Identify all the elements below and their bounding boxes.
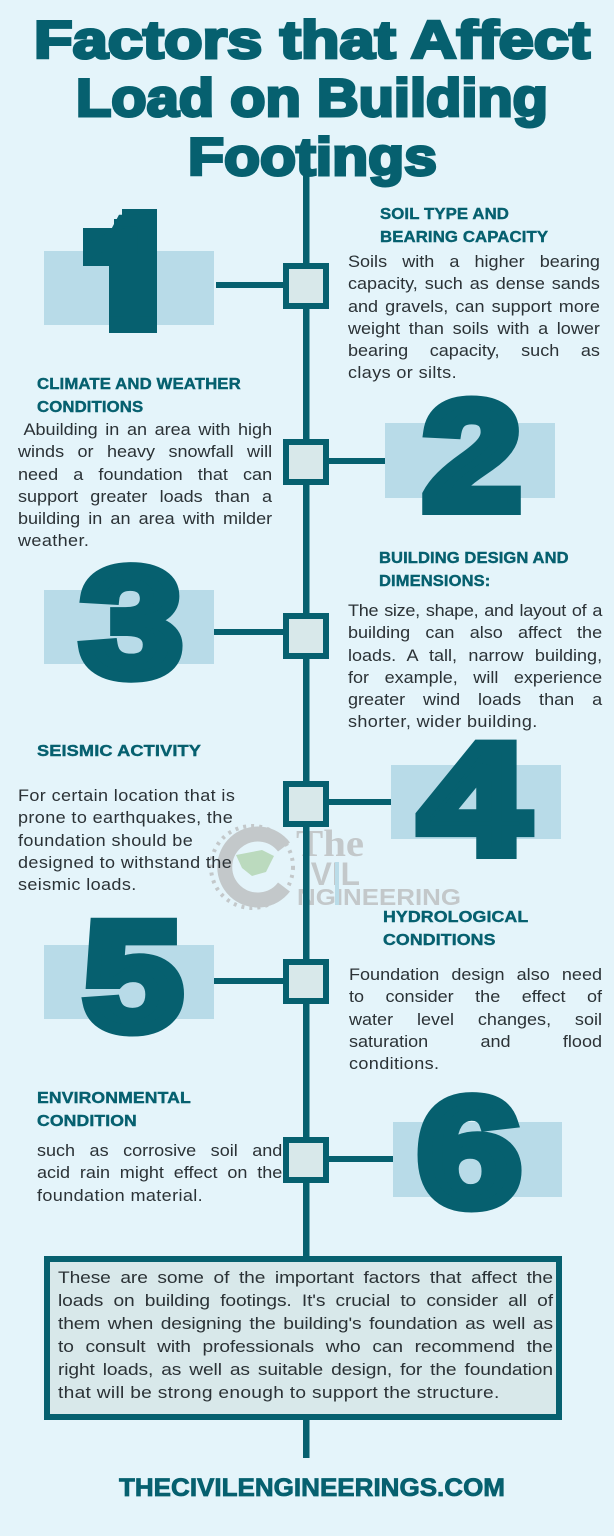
text: building design: greater wind loads than a (348, 691, 602, 709)
number 3 block: 3 (81, 537, 182, 708)
heading: building design: BUILDING DESIGN AND (379, 550, 569, 567)
text: climate (18, 421, 272, 550)
text: seismic: For certain location that is (18, 787, 235, 805)
title (34, 11, 590, 187)
conclusion text: to consult with professionals who can recommend the (58, 1338, 553, 1356)
connector node 4 (286, 784, 391, 824)
number 5 block (44, 891, 214, 1062)
text: seismic (18, 787, 235, 894)
text: hydrological: conditions. (349, 1055, 439, 1073)
connector node 3 (214, 616, 326, 656)
text: hydrological: Foundation design also need (349, 966, 602, 984)
heading: environmental (37, 1090, 191, 1130)
text: building design: loads. A tall, narrow building, (348, 647, 602, 665)
number 3 block (44, 537, 214, 708)
heading: building design (379, 550, 569, 590)
number 4 block: 4 (420, 713, 528, 887)
central timeline line (303, 176, 310, 1458)
text: soil type (348, 253, 600, 382)
text: seismic: foundation should be (18, 832, 193, 850)
heading: soil type (380, 206, 548, 246)
number 2 block (385, 370, 555, 542)
text: seismic: seismic loads. (18, 876, 137, 894)
conclusion text: These are some of the important factors that affect the (58, 1269, 553, 1287)
text: seismic: prone to earthquakes, the (18, 809, 233, 827)
number 2 block: 2 (423, 370, 521, 542)
connector node 1 (216, 266, 326, 306)
number 1 block (44, 209, 214, 333)
connector node 5 (214, 962, 326, 1001)
watermark logo (211, 823, 461, 910)
heading: seismic: SEISMIC ACTIVITY (37, 743, 201, 760)
text: climate: building in an area with milder (18, 510, 272, 528)
text: climate: weather. (18, 532, 89, 550)
text: hydrological: to consider the effect of (349, 988, 602, 1006)
conclusion text: that will be strong enough to support the structure. (58, 1384, 500, 1402)
connector node 6 (286, 1140, 393, 1180)
heading: hydrological: CONDITIONS (383, 932, 496, 949)
conclusion box frame (47, 1259, 559, 1417)
heading: hydrological: HYDROLOGICAL (383, 909, 528, 926)
text: building design: building can also affect the (348, 624, 602, 642)
heading: climate: CLIMATE AND WEATHER (37, 376, 241, 393)
text: soil type: and gravels, can support more (348, 298, 600, 316)
title: Factors that Affect (34, 11, 590, 70)
text: climate: Abuilding in an area with high (24, 421, 272, 439)
title: Footings (188, 128, 437, 187)
text: soil type: bearing capacity, such as (348, 342, 600, 360)
watermark logo: IVIL (302, 856, 360, 892)
text: building design: The size, shape, and layout of a (348, 602, 602, 620)
text: building design: for example, will experience (348, 669, 602, 687)
heading: soil type: BEARING CAPACITY (380, 229, 548, 246)
conclusion text (58, 1269, 554, 1402)
conclusion text: right loads, as well as suitable design, for the foundation (58, 1361, 553, 1379)
text: climate: need a foundation that can (18, 466, 272, 484)
title: Load on Building (76, 69, 548, 128)
text: building design (348, 602, 602, 731)
number 4 block (391, 713, 561, 887)
text: soil type: capacity, such as dense sands (348, 275, 600, 293)
heading: building design: DIMENSIONS: (379, 573, 490, 590)
watermark logo: The (296, 823, 364, 865)
number 6 block: 6 (418, 1067, 521, 1238)
text: hydrological: saturation and flood (349, 1033, 602, 1051)
heading: climate: CONDITIONS (37, 399, 143, 416)
heading: hydrological (383, 909, 528, 949)
text: environmental: foundation material. (37, 1187, 203, 1205)
heading: soil type: SOIL TYPE AND (380, 206, 509, 223)
text: environmental: acid rain might effect on the (37, 1164, 282, 1182)
text: environmental (37, 1142, 282, 1205)
connector node 2 (286, 442, 385, 482)
text: building design: shorter, wider building. (348, 713, 538, 731)
text: soil type: clays or silts. (348, 364, 457, 382)
number 1 block: 1 (68, 188, 184, 359)
text: environmental: such as corrosive soil and (37, 1142, 282, 1160)
number 6 block (393, 1067, 562, 1238)
text: soil type: Soils with a higher bearing (348, 253, 600, 271)
text: climate: winds or heavy snowfall will (18, 443, 272, 461)
heading: climate (37, 376, 241, 416)
text: hydrological (349, 966, 602, 1073)
heading: environmental: ENVIRONMENTAL (37, 1090, 191, 1107)
conclusion text: loads on building footings. It's crucial to consider all of (58, 1292, 553, 1310)
text: soil type: weight than soils with a lower (348, 320, 600, 338)
watermark logo: NGINEERING (297, 884, 461, 910)
text: climate: support greater loads than a (18, 488, 272, 506)
text: hydrological: water level changes, soil (349, 1011, 602, 1029)
number 5 block: 5 (84, 891, 182, 1062)
footer website: THECIVILENGINEERINGS.COM (119, 1474, 505, 1502)
heading: environmental: CONDITION (37, 1113, 137, 1130)
text: seismic: designed to withstand the (18, 854, 232, 872)
conclusion text: them when designing the building's foundation as well as (58, 1315, 553, 1333)
